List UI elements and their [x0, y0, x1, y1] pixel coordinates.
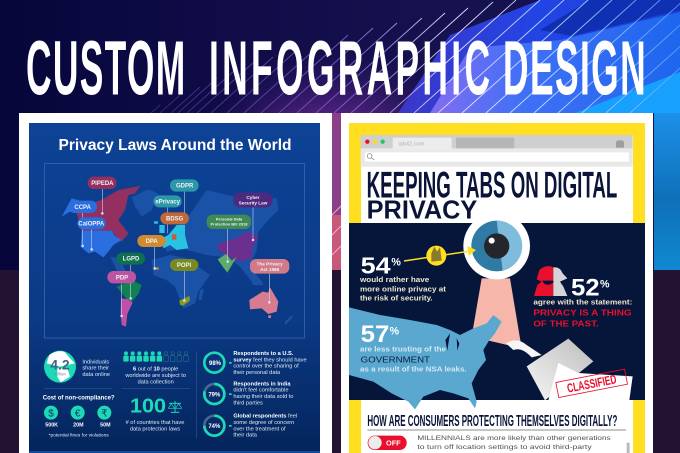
usa: [62, 198, 122, 257]
stat: 57: [360, 321, 467, 374]
panel: privacy laws: [19, 113, 332, 453]
stat: 100 countries: 100: [130, 395, 166, 417]
label: CCPA: [69, 201, 97, 213]
text: global respondents: Global respondents feel: [233, 414, 297, 420]
label: CalOPPA: [77, 217, 106, 229]
stat: 54: %: [391, 257, 401, 269]
label: POPI: [170, 259, 198, 271]
text: individuals: Individuals: [82, 359, 109, 365]
label: The Privacy Act 1988: [250, 259, 289, 274]
stat: 54: more online privacy at: [360, 286, 447, 293]
text: six out of ten: data collection: [138, 379, 174, 385]
stat: 52: [533, 274, 632, 329]
india: [218, 254, 237, 273]
text: six out of ten: 6 out of 10 people: [133, 367, 178, 373]
text: countries: data protection laws: [130, 427, 180, 433]
usa map: [349, 307, 502, 409]
label: LGPD: [116, 253, 145, 265]
stat: 57: %: [390, 325, 400, 337]
label: The Privacy Act 1988: The Privacy: [257, 261, 283, 266]
icons: currencies: 50M: [100, 422, 111, 428]
icons: currencies: 500K: [45, 422, 58, 428]
label: BDSG: [160, 212, 189, 224]
australia: [249, 287, 278, 314]
canada: [77, 186, 140, 242]
toggle: off: OFF: [386, 438, 401, 447]
hand curve: [506, 340, 542, 357]
text: respondents us: [233, 351, 307, 376]
label: Personal Data Protection Bill: Personal Data: [216, 216, 243, 221]
globe stat: [44, 351, 76, 383]
title: CUSTOM: [26, 25, 187, 111]
beam: [472, 278, 522, 348]
browser chrome: lab42.com: [398, 141, 425, 147]
rings: [204, 353, 224, 436]
stat: 52: 52: [571, 274, 600, 301]
label: Cyber Security Law: Cyber: [246, 195, 260, 200]
stat: 57: 57: [361, 321, 389, 348]
text: global respondents: their data: [233, 432, 258, 438]
browser chrome: [361, 135, 633, 167]
label: ePrivacy: ePrivacy: [155, 199, 181, 205]
label: BDSG: BDSG: [166, 216, 184, 222]
text: footnote: *potential fines for violations: [49, 433, 109, 439]
stat: 54: [359, 252, 447, 303]
panel: digital privacy: [341, 113, 653, 453]
label: PDP: PDP: [116, 275, 128, 281]
label: PIPEDA: PIPEDA: [91, 181, 114, 187]
stat: 57: GOVERNMENT: [361, 355, 430, 365]
title: DESIGN: [503, 25, 647, 111]
stat: 54: 54: [361, 252, 391, 278]
stat: 52: OF THE PAST.: [533, 319, 599, 329]
argentina: [121, 298, 133, 327]
stat: 52: agree with the statement:: [533, 300, 632, 307]
brazil: [117, 281, 142, 304]
text: global respondents: over the treatment of: [233, 426, 286, 432]
text: six out of ten: [124, 367, 186, 385]
title: INFOGRAPHIC: [209, 25, 493, 111]
text: respondents us: their personal data: [233, 370, 281, 376]
icons: currencies: $: [48, 408, 54, 419]
icon: spy: [534, 266, 567, 296]
icons: currencies: ₹: [101, 408, 108, 419]
label: Cyber Security Law: [233, 193, 273, 207]
label: DPA: DPA: [146, 239, 158, 245]
text: respondents india: didn't feel comfortable: [233, 388, 289, 394]
label: GDPR: GDPR: [176, 184, 194, 190]
toggle: off: [368, 436, 407, 450]
globe stat: 4.2: [50, 357, 70, 373]
stat: 52: PRIVACY IS A THING: [533, 307, 632, 317]
stats section: 74%: [208, 424, 221, 430]
heading: privacy laws: Privacy Laws Around the World: [58, 137, 292, 154]
china: [216, 232, 258, 262]
text: respondents india: [233, 381, 293, 406]
text: respondents us: Respondents to a U.S.: [233, 351, 294, 357]
eu: [154, 221, 188, 250]
text: countries: [126, 420, 184, 433]
icons: currencies: [44, 406, 111, 428]
label: PDP: [107, 271, 136, 283]
label: CCPA: CCPA: [74, 205, 92, 211]
text: share: share their: [82, 366, 109, 372]
label: Cyber Security Law: Security Law: [239, 200, 268, 205]
map frame with world map: [44, 164, 304, 338]
dark section: [349, 223, 645, 400]
label: PIPEDA: [88, 177, 116, 189]
label: Personal Data Protection Bill: Protection Bill 2018: [211, 222, 248, 227]
text: respondents us: control over the sharing of: [233, 363, 299, 369]
section: consumers: [367, 413, 630, 453]
text: millennials: [417, 435, 611, 453]
text: respondents india: having their data sold to: [233, 394, 293, 400]
stat: 57: as a result of the NSA leaks.: [360, 367, 467, 374]
label: GDPR: [170, 179, 199, 192]
stat: 54: would rather have: [359, 277, 429, 284]
text: respondents india: Respondents in India: [233, 381, 291, 387]
stat: 57: are less trusting of the: [360, 347, 446, 354]
text: countries: # of countries that have: [126, 420, 184, 426]
globe stat: billion: [54, 372, 66, 377]
text: millennials: MILLENNIALS are more likely than other generations: [417, 435, 611, 442]
text: millennials: to turn off location settings to avoid third-party: [417, 444, 593, 451]
stamp: classified: CLASSIFIED: [566, 372, 618, 396]
text: global respondents: some degree of concern: [233, 420, 294, 426]
papers: [527, 339, 633, 400]
text: respondents us: survey feel they should have: [233, 357, 307, 363]
text: cost heading: Cost of non-compliance?: [43, 395, 115, 401]
label: CalOPPA: CalOPPA: [78, 222, 105, 228]
arrow with lock: [404, 246, 476, 266]
label: DPA: [137, 235, 166, 247]
stats section: 79%: [208, 392, 221, 398]
label: The Privacy Act 1988: Act 1988: [260, 267, 280, 272]
label: POPI: POPI: [177, 263, 191, 269]
text: data online: data online: [82, 372, 110, 378]
icon row: people: [123, 351, 188, 362]
stats section: 98%: [209, 361, 222, 367]
stat: 54: the risk of security.: [360, 296, 433, 303]
icons: currencies: 20M: [73, 422, 84, 428]
heading: privacy: PRIVACY: [367, 196, 477, 224]
label: LGPD: LGPD: [123, 257, 140, 263]
label: ePrivacy: [153, 195, 182, 207]
stat: 52: %: [600, 278, 610, 290]
text: six out of ten: worldwide are subject to: [124, 373, 186, 379]
icons: currencies: €: [75, 408, 81, 419]
eye: [463, 213, 530, 279]
icon: scales: [168, 401, 182, 412]
text: global respondents: [233, 414, 297, 438]
text: respondents india: third parties: [233, 400, 263, 406]
title: [26, 25, 647, 111]
south africa: [179, 296, 190, 306]
stats section: [43, 351, 307, 439]
label: Personal Data Protection Bill: [207, 215, 251, 229]
